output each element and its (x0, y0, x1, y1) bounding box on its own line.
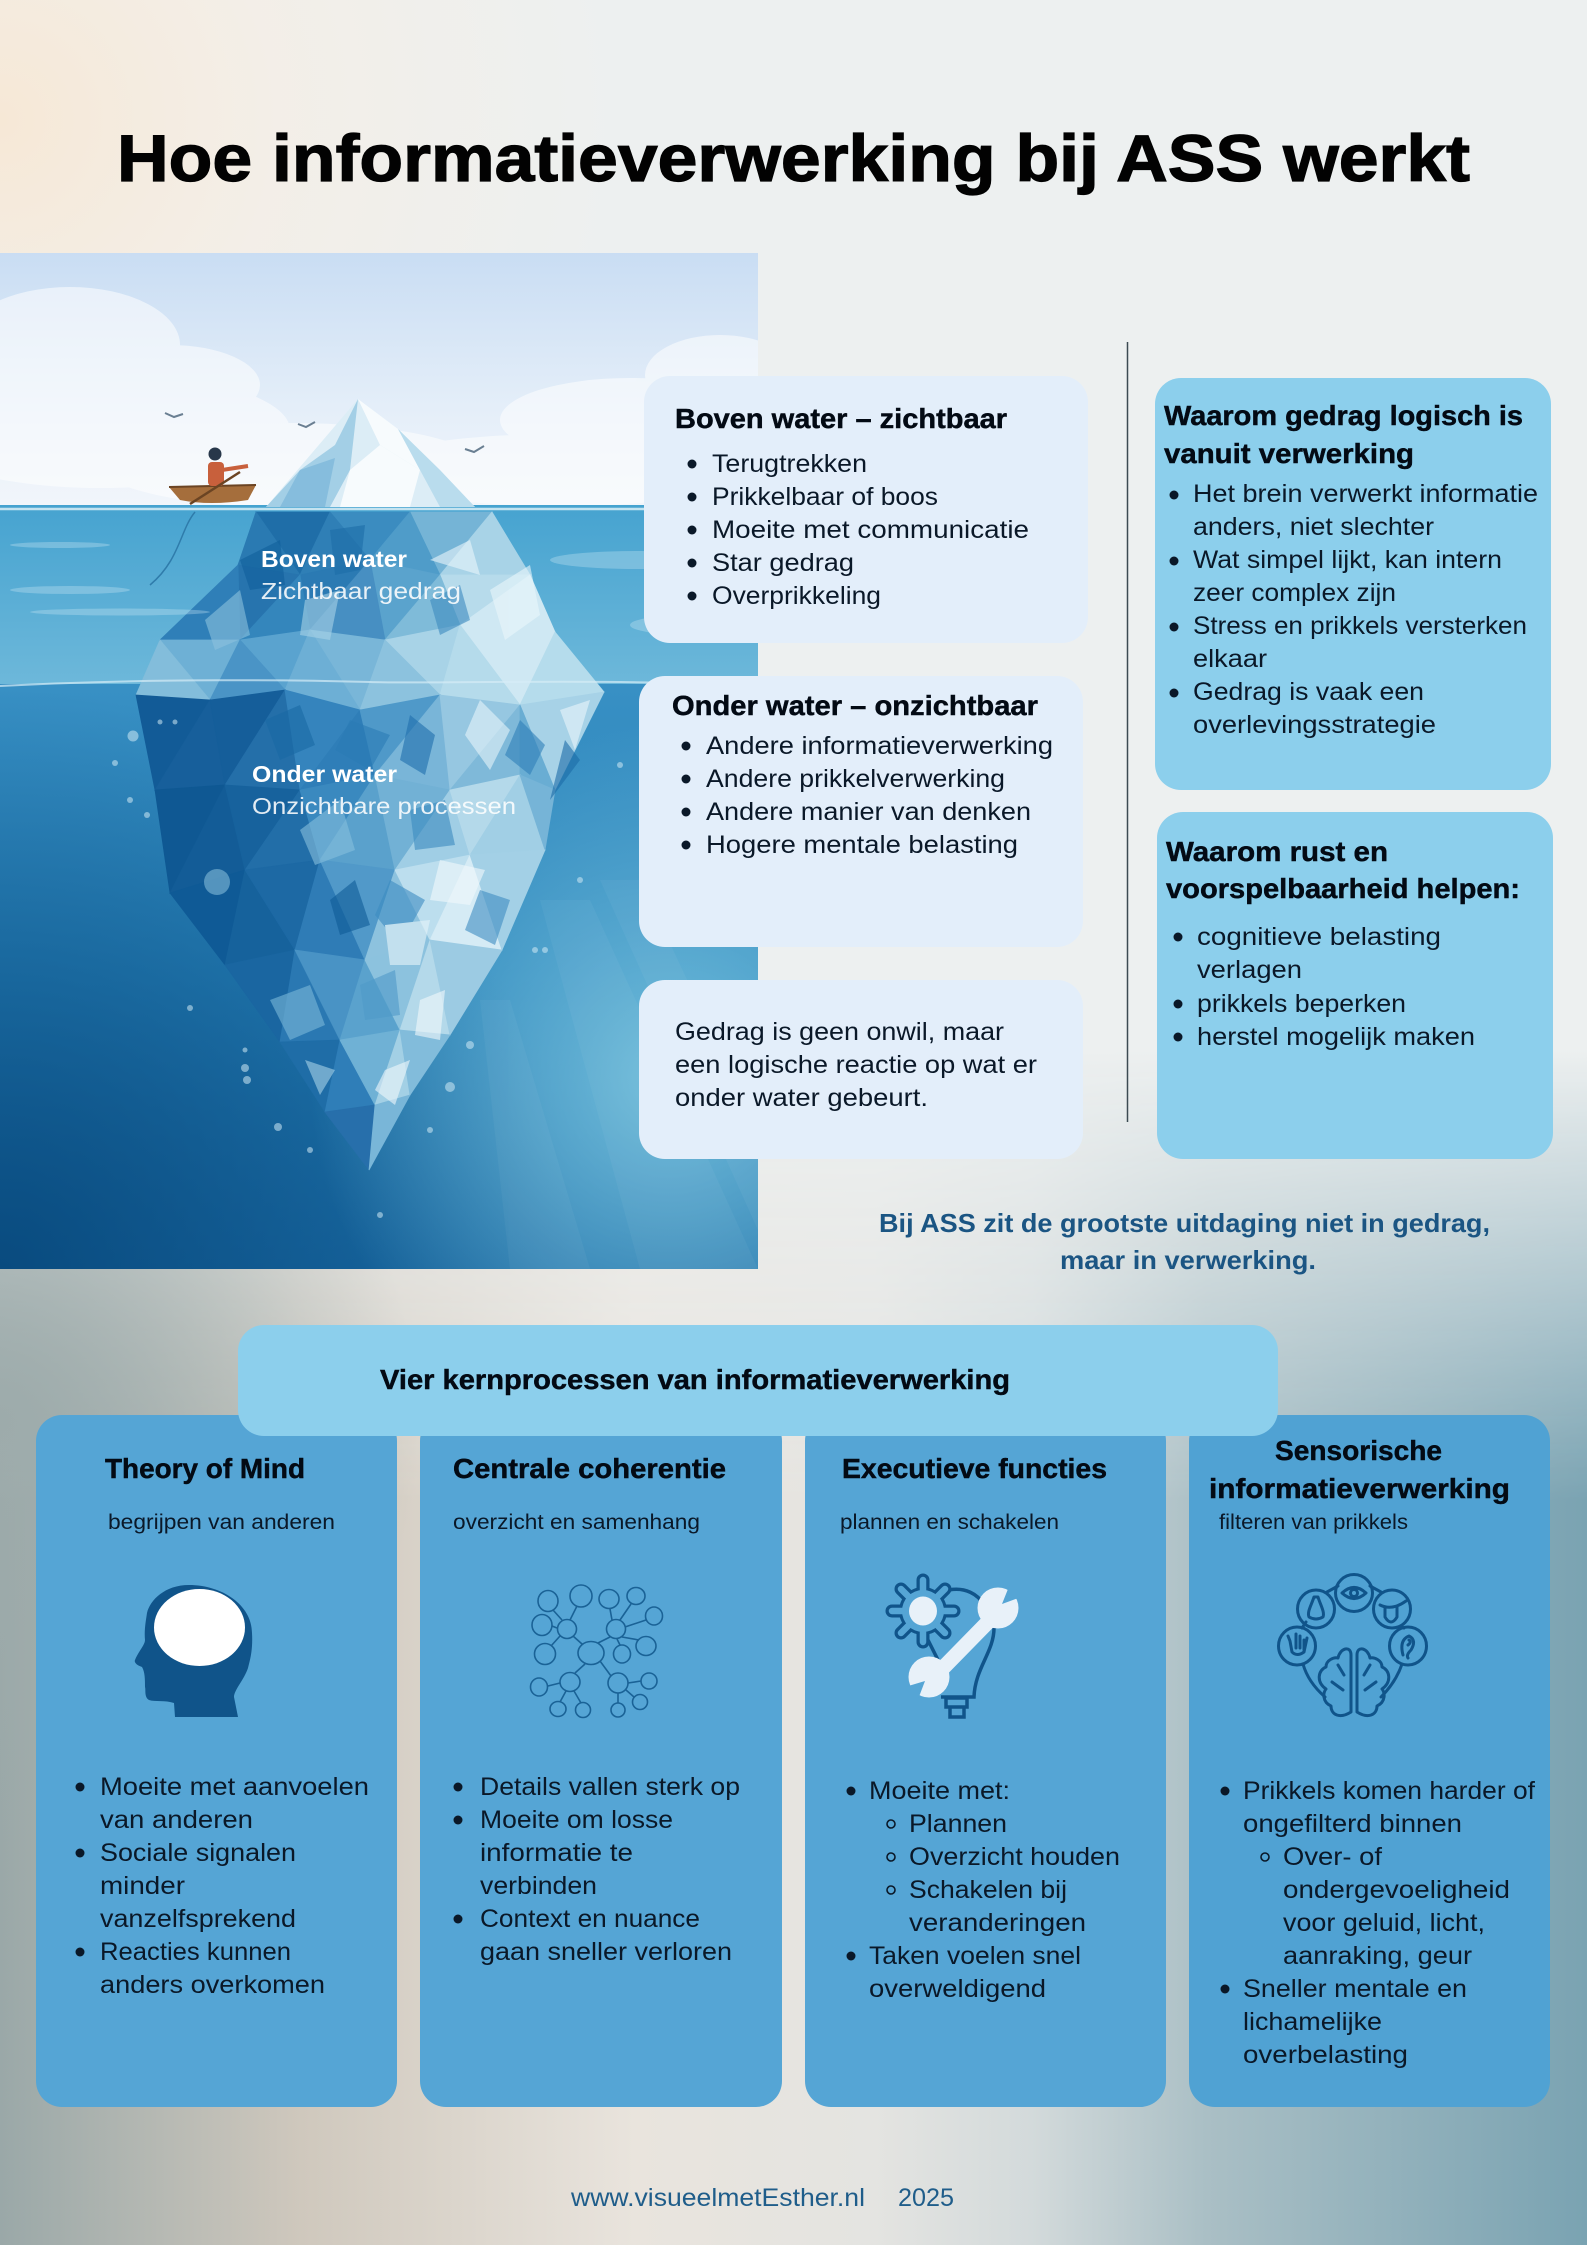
panel: waarom rust en voorspelbaarheid helpen: voorspelbaarheid helpen: (1166, 873, 1520, 904)
boat and rower (150, 448, 256, 585)
banner: vier kernprocessen: Vier kernprocessen van informatieverwerking (380, 1364, 1010, 1395)
panel: gedrag conclusie: Gedrag is geen onwil, maar (675, 1018, 1004, 1046)
panel: sensorische informatieverwerking: Over- of (1283, 1843, 1382, 1871)
panel: sensorische informatieverwerking: filteren van prikkels (1219, 1510, 1408, 1534)
panel: theory of mind: Sociale signalen (100, 1839, 296, 1867)
surface ripples (10, 542, 649, 632)
panel: waarom gedrag logisch is: elkaar (1193, 645, 1267, 673)
panel: onder water: Andere manier van denken (706, 798, 1031, 826)
panel: theory of mind: Theory of Mind (105, 1453, 305, 1484)
panel: executieve functies: Plannen (909, 1810, 1007, 1838)
panel: onder water: Hogere mentale belasting (706, 831, 1018, 859)
panel: theory of mind: vanzelfsprekend (100, 1905, 296, 1933)
icon: head with brain area (135, 1585, 252, 1717)
panel: executieve functies: Executieve functies (842, 1453, 1107, 1484)
panel: sensorische informatieverwerking (1189, 1415, 1550, 2107)
clouds (0, 287, 758, 490)
panel: gedrag conclusie (639, 980, 1083, 1159)
panel: boven water: Overprikkeling (712, 582, 881, 610)
panel: centrale coherentie: overzicht en samenhang (453, 1510, 700, 1534)
panel: executieve functies: Schakelen bij (909, 1876, 1067, 1904)
panel: sensorische informatieverwerking: aanraking, geur (1283, 1942, 1472, 1970)
panel: sensorische informatieverwerking: voor geluid, licht, (1283, 1909, 1485, 1937)
panel: waarom gedrag logisch is: Waarom gedrag logisch is (1164, 400, 1523, 431)
panel: waarom rust en voorspelbaarheid helpen: Waarom rust en (1166, 836, 1388, 867)
panel: waarom gedrag logisch is: vanuit verwerking (1164, 438, 1414, 469)
icon: network (530, 1585, 662, 1718)
panel: waarom rust en voorspelbaarheid helpen (1157, 812, 1553, 1159)
panel: waarom gedrag logisch is: overlevingsstrategie (1193, 711, 1436, 739)
icon: senses and brain (1278, 1574, 1426, 1716)
panel: executieve functies: Taken voelen snel (869, 1942, 1081, 1970)
panel: boven water: Terugtrekken (712, 450, 867, 478)
panel: waarom rust en voorspelbaarheid helpen: verlagen (1197, 956, 1302, 984)
panel: waarom gedrag logisch is: Stress en prikkels versterken (1193, 612, 1527, 640)
panel: boven water (644, 376, 1088, 643)
iceberg small facets (205, 525, 590, 1105)
statement (879, 1208, 1490, 1275)
panel: waarom gedrag logisch is: anders, niet slechter (1193, 513, 1434, 541)
banner: vier kernprocessen (238, 1325, 1278, 1436)
panel: waarom gedrag logisch is: Gedrag is vaak een (1193, 678, 1424, 706)
panel: boven water: Boven water – zichtbaar (675, 403, 1007, 434)
panel: waarom gedrag logisch is (1155, 378, 1551, 790)
panel: theory of mind (36, 1415, 397, 2107)
panel: sensorische informatieverwerking: overbelasting (1243, 2041, 1408, 2069)
panel: onder water: Andere informatieverwerking (706, 732, 1053, 760)
panel: executieve functies: Moeite met: (869, 1777, 1010, 1805)
light rays (480, 880, 758, 1269)
panel: onder water: Onder water – onzichtbaar (672, 690, 1038, 721)
panel: waarom gedrag logisch is: zeer complex zijn (1193, 579, 1396, 607)
panel: theory of mind: van anderen (100, 1806, 253, 1834)
panel: theory of mind: begrijpen van anderen (108, 1510, 335, 1534)
panel: centrale coherentie: Context en nuance (480, 1905, 700, 1933)
footer: www.visueelmetEsther.nl (570, 2184, 865, 2212)
panel: waarom gedrag logisch is: Wat simpel lijkt, kan intern (1193, 546, 1502, 574)
panel: gedrag conclusie: een logische reactie op wat er (675, 1051, 1037, 1079)
birds (165, 413, 484, 452)
icon: gear and wrench (892, 1580, 1024, 1717)
panel: executieve functies: overweldigend (869, 1975, 1046, 2003)
panel: onder water (639, 676, 1083, 947)
panel: theory of mind: Moeite met aanvoelen (100, 1773, 369, 1801)
label: boven water: Boven water (261, 546, 407, 572)
bubbles (112, 720, 623, 1218)
panel: sensorische informatieverwerking: ondergevoeligheid (1283, 1876, 1510, 1904)
panel: centrale coherentie: Centrale coherentie (453, 1453, 726, 1484)
panel: theory of mind: Reacties kunnen (100, 1938, 291, 1966)
panel: centrale coherentie: gaan sneller verloren (480, 1938, 732, 1966)
title: Hoe informatieverwerking bij ASS werkt (117, 121, 1470, 195)
panel: sensorische informatieverwerking: lichamelijke (1243, 2008, 1382, 2036)
panel: executieve functies: Overzicht houden (909, 1843, 1120, 1871)
panel: theory of mind: minder (100, 1872, 185, 1900)
panel: centrale coherentie: Moeite om losse (480, 1806, 673, 1834)
footer: 2025 (898, 2184, 954, 2212)
panel: centrale coherentie: Details vallen sterk op (480, 1773, 740, 1801)
panel: theory of mind: anders overkomen (100, 1971, 325, 1999)
panel: waarom gedrag logisch is: Het brein verwerkt informatie (1193, 480, 1538, 508)
waterlines (0, 508, 758, 510)
panel: sensorische informatieverwerking: Sensorische (1275, 1435, 1442, 1466)
illustration: iceberg (0, 253, 795, 1269)
panel: waarom rust en voorspelbaarheid helpen: herstel mogelijk maken (1197, 1023, 1475, 1051)
statement: maar in verwerking. (1060, 1245, 1316, 1275)
panel: centrale coherentie: informatie te (480, 1839, 633, 1867)
panel: boven water: Moeite met communicatie (712, 516, 1029, 544)
iceberg tip (266, 399, 475, 507)
panel: boven water: Prikkelbaar of boos (712, 483, 938, 511)
iceberg underwater facets (136, 512, 604, 1170)
panel: sensorische informatieverwerking: Prikkels komen harder of (1243, 1777, 1535, 1805)
panel: waarom rust en voorspelbaarheid helpen: cognitieve belasting (1197, 923, 1441, 951)
label: boven water (261, 546, 461, 604)
label: boven water: Zichtbaar gedrag (261, 578, 461, 604)
panel: boven water: Star gedrag (712, 549, 854, 577)
panel: sensorische informatieverwerking: ongefilterd binnen (1243, 1810, 1462, 1838)
panel: sensorische informatieverwerking: Sneller mentale en (1243, 1975, 1467, 2003)
panel: executieve functies: plannen en schakelen (840, 1510, 1059, 1534)
label: onder water: Onzichtbare processen (252, 793, 516, 819)
label: onder water: Onder water (252, 761, 397, 787)
statement: Bij ASS zit de grootste uitdaging niet in gedrag, (879, 1208, 1490, 1238)
panel: executieve functies (805, 1415, 1166, 2107)
panel: sensorische informatieverwerking: informatieverwerking (1209, 1473, 1510, 1504)
panel: waarom rust en voorspelbaarheid helpen: prikkels beperken (1197, 990, 1406, 1018)
label: onder water (252, 761, 516, 819)
panel: centrale coherentie: verbinden (480, 1872, 597, 1900)
panel: centrale coherentie (420, 1415, 782, 2107)
panel: onder water: Andere prikkelverwerking (706, 765, 1005, 793)
panel: executieve functies: veranderingen (909, 1909, 1086, 1937)
panel: gedrag conclusie: onder water gebeurt. (675, 1084, 928, 1112)
